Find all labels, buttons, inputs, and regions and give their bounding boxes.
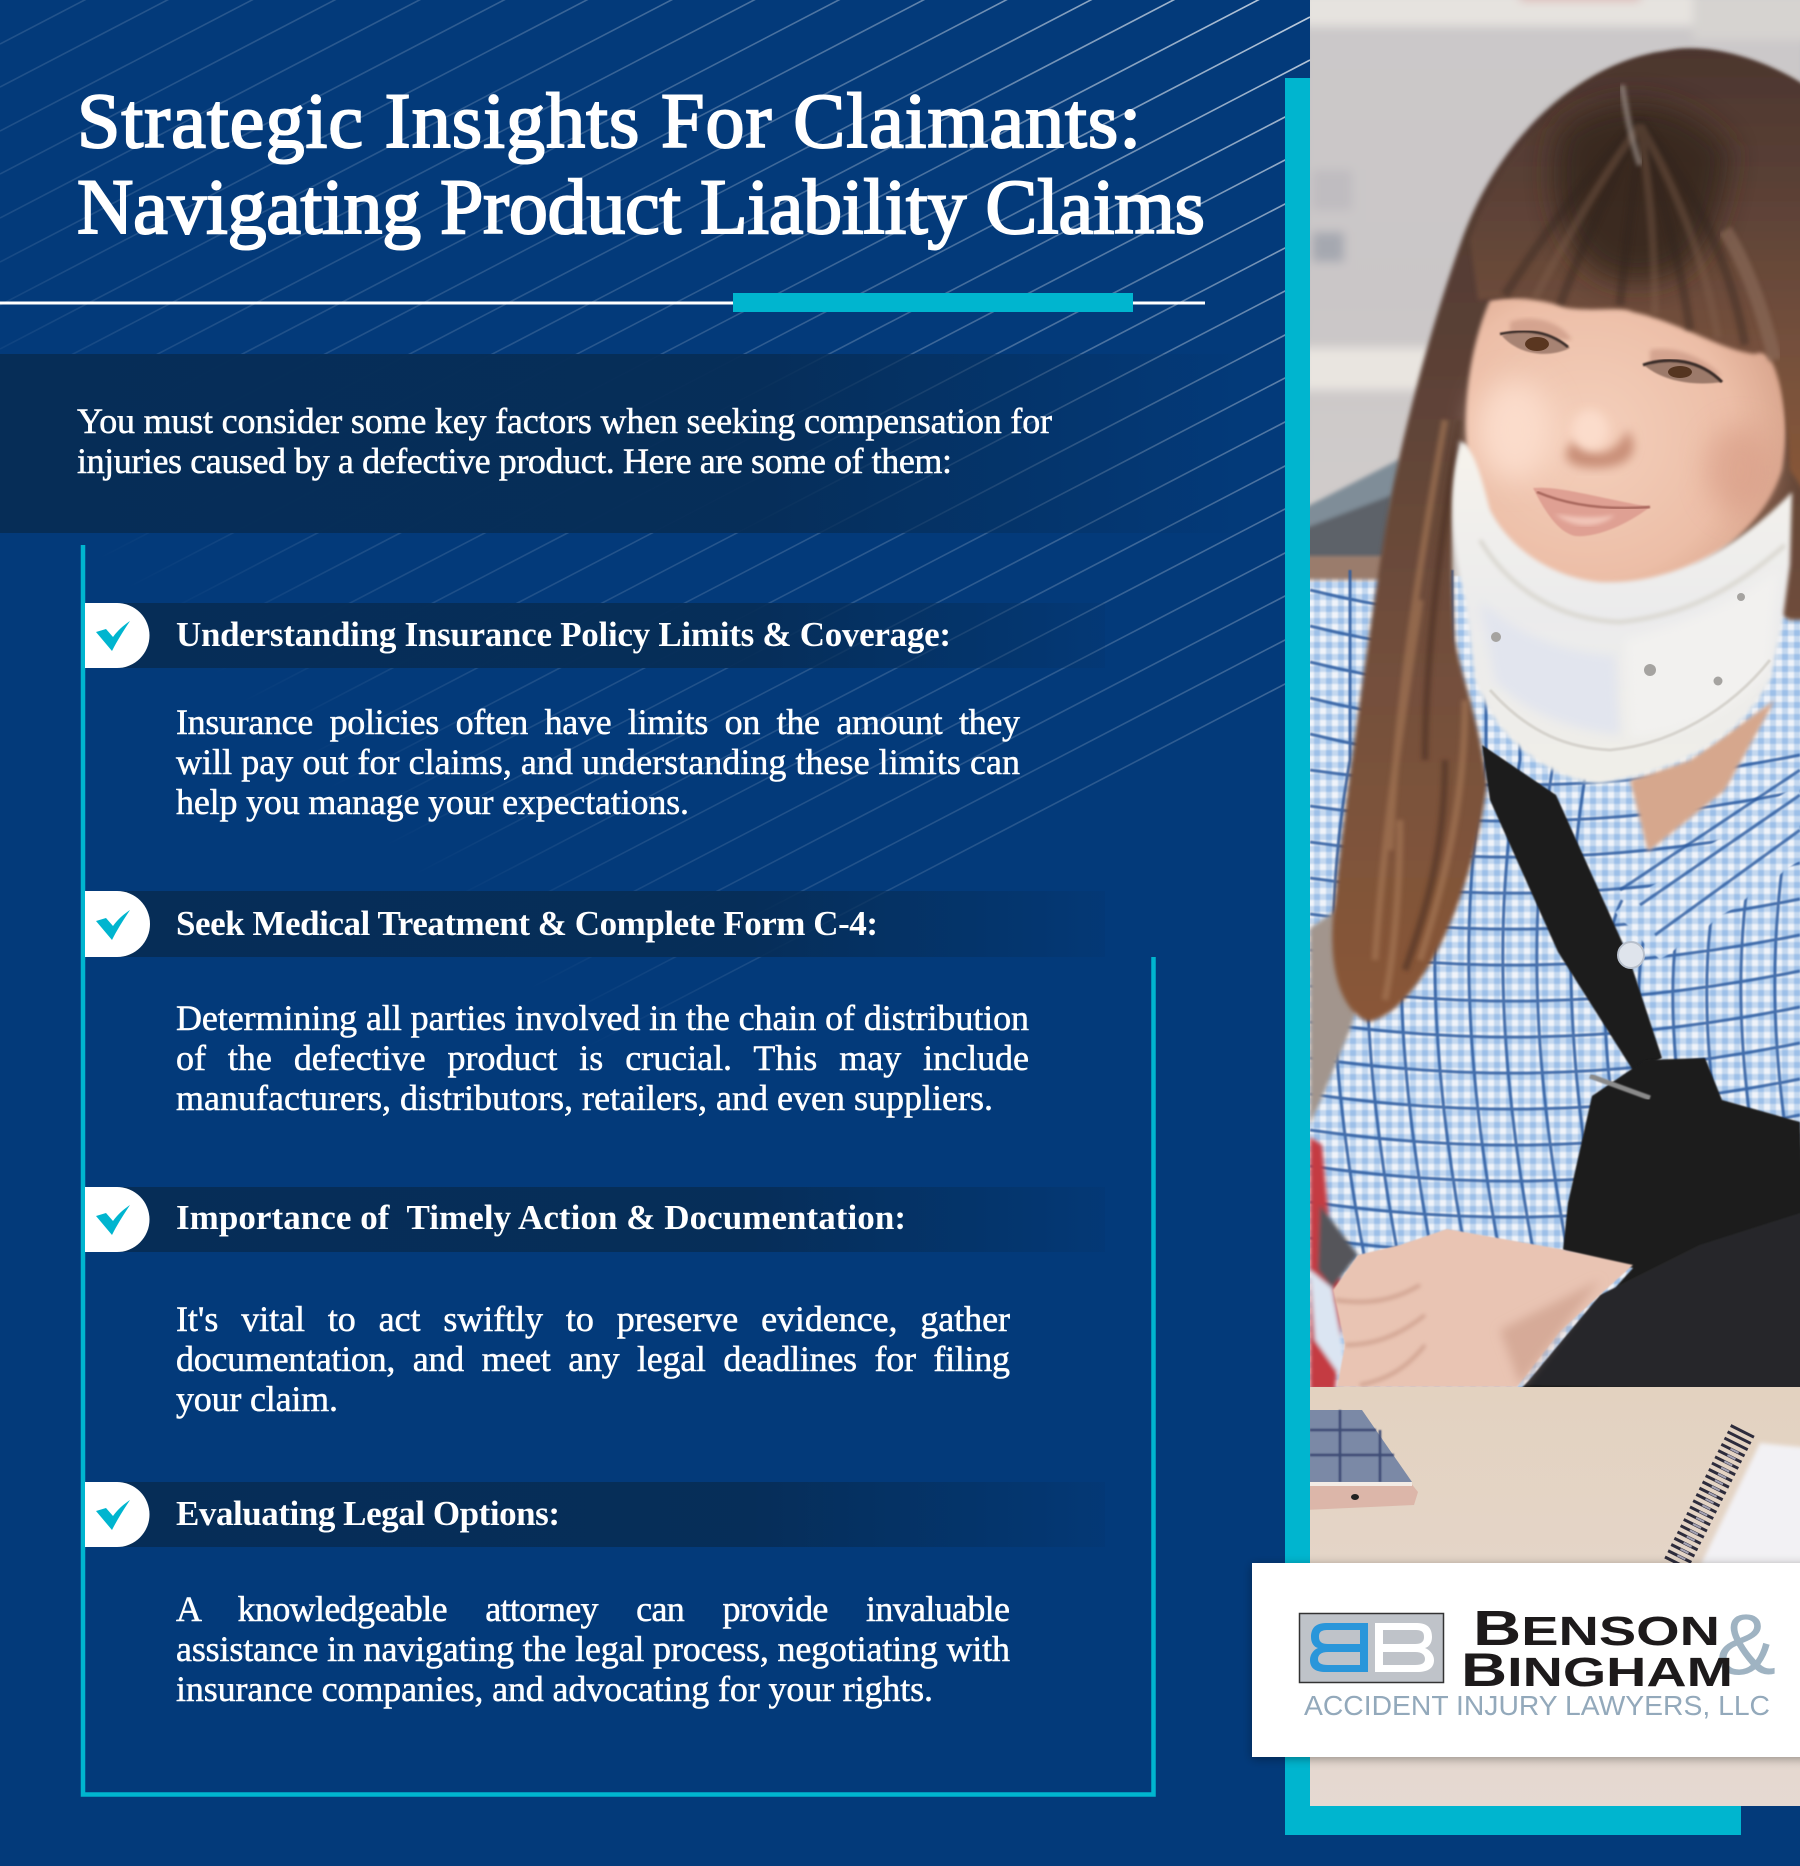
item 2 header bar <box>85 891 1105 957</box>
phone <box>1305 1410 1418 1510</box>
logo mark <box>1300 1614 1444 1682</box>
item 1 heading: Understanding Insurance Policy Limits & Coverage: <box>176 615 951 654</box>
photo: injured woman in neck brace <box>1300 0 1800 1817</box>
item 3 header bar <box>85 1187 1105 1252</box>
item 4 body <box>176 1589 1010 1709</box>
sling buckle <box>1590 1076 1650 1098</box>
neck skin <box>1630 700 1775 852</box>
item 3 body <box>176 1299 1010 1419</box>
eyes <box>1500 319 1722 383</box>
intro panel <box>0 354 1250 533</box>
list frame <box>83 545 1154 1794</box>
item 3 body: documentation, and meet any legal deadlines for filing <box>176 1339 1010 1379</box>
item 3 <box>85 1187 1105 1419</box>
item 4 header bar <box>85 1482 1105 1547</box>
item 1 body: will pay out for claims, and understanding these limits can <box>176 742 1020 782</box>
item 4 body: A knowledgeable attorney can provide invaluable <box>176 1589 1010 1629</box>
chair and background left of body <box>1310 910 1360 1387</box>
fringe <box>1470 49 1800 500</box>
nose shadow and lips <box>1533 410 1650 536</box>
neck brace <box>1453 443 1792 784</box>
item 1 body: help you manage your expectations. <box>176 782 689 822</box>
item 2 check icon <box>85 891 150 957</box>
logo name: B ENSON <box>1473 1602 1720 1656</box>
title <box>77 77 1205 250</box>
item 3 check icon <box>85 1187 150 1252</box>
logo name: B INGHAM <box>1461 1643 1733 1696</box>
intro panel: You must consider some key factors when seeking compensation for <box>77 401 1052 441</box>
item 1 header bar <box>85 603 1105 668</box>
teal photo frame <box>1285 78 1741 1835</box>
item 1 <box>85 603 1105 822</box>
logo tagline: ACCIDENT INJURY LAWYERS, LLC <box>1304 1690 1770 1721</box>
item 4 <box>85 1482 1105 1709</box>
item 1 check icon <box>85 603 150 668</box>
item 2 body: Determining all parties involved in the chain of distribution <box>176 998 1029 1038</box>
title divider <box>0 293 1205 312</box>
hand and forearm <box>1333 1229 1633 1387</box>
item 4 heading: Evaluating Legal Options: <box>176 1494 560 1533</box>
chair back <box>1310 458 1400 558</box>
item 3 heading: Importance of Timely Action & Documentation: <box>176 1198 906 1237</box>
table <box>1300 1387 1800 1817</box>
item 3 body: your claim. <box>176 1379 338 1419</box>
face <box>1466 280 1786 592</box>
shirt collar flap <box>1615 770 1800 960</box>
sling strap <box>1482 745 1662 1072</box>
item 2 <box>85 891 1105 1118</box>
item 2 body: manufacturers, distributors, retailers, and even suppliers. <box>176 1078 993 1118</box>
shirt button <box>1618 942 1644 968</box>
item 2 heading: Seek Medical Treatment & Complete Form C-4: <box>176 904 878 943</box>
item 4 body: insurance companies, and advocating for your rights. <box>176 1669 933 1709</box>
title: Strategic Insights For Claimants: <box>77 77 1141 164</box>
intro panel: injuries caused by a defective product. Here are some of them: <box>77 441 952 481</box>
shirt <box>1300 556 1800 1400</box>
sling <box>1510 1058 1800 1400</box>
hair <box>1332 49 1800 1022</box>
item 1 body: Insurance policies often have limits on the amount they <box>176 702 1020 742</box>
title: Navigating Product Liability Claims <box>77 163 1205 250</box>
item 2 body <box>176 998 1029 1118</box>
item 1 body <box>176 702 1020 822</box>
item 4 body: assistance in navigating the legal process, negotiating with <box>176 1629 1010 1669</box>
logo name <box>1461 1602 1733 1696</box>
logo panel <box>1252 1563 1800 1757</box>
photo wall background <box>1300 0 1800 610</box>
item 2 body: of the defective product is crucial. This may include <box>176 1038 1029 1078</box>
item 3 body: It's vital to act swiftly to preserve evidence, gather <box>176 1299 1010 1339</box>
notebook <box>1675 1430 1800 1566</box>
item 4 check icon <box>85 1482 150 1547</box>
logo ampersand: & <box>1716 1597 1776 1693</box>
